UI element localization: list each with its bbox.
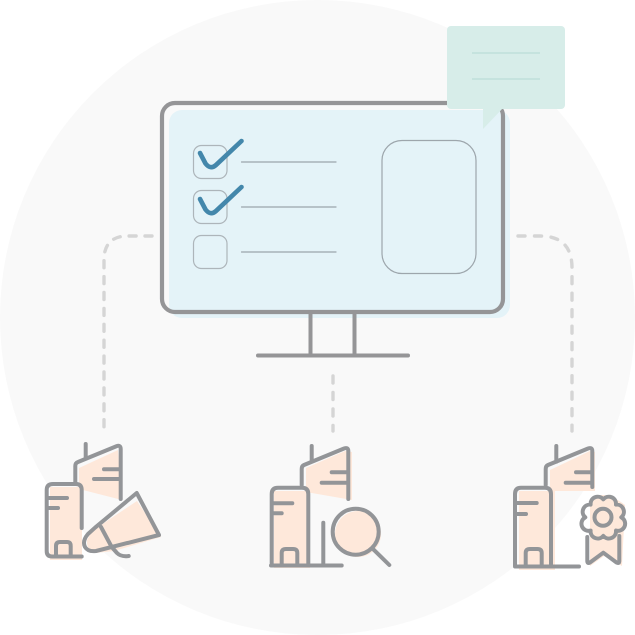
monitor stand bbox=[258, 312, 408, 356]
peach fills bbox=[274, 451, 352, 568]
dashed connector: middle bbox=[331, 376, 335, 431]
dashed connector: right bbox=[518, 236, 572, 431]
back tower bbox=[75, 444, 121, 499]
megaphone bbox=[84, 493, 159, 556]
icon: building with magnifying glass bbox=[271, 446, 389, 568]
back tower bbox=[302, 446, 348, 499]
checklist row 1 bbox=[194, 141, 336, 178]
speech bubble bbox=[447, 26, 565, 129]
image placeholder panel bbox=[382, 140, 476, 274]
front tower bbox=[515, 488, 579, 566]
front tower bbox=[271, 488, 342, 566]
monitor frame bbox=[162, 103, 503, 312]
icon: building with award ribbon bbox=[515, 446, 625, 570]
award rosette bbox=[581, 497, 625, 538]
back tower bbox=[546, 446, 592, 487]
monitor screen fill bbox=[169, 110, 510, 318]
dashed connector: left bbox=[104, 236, 152, 428]
peach fills bbox=[519, 451, 625, 570]
monitor bbox=[162, 103, 510, 356]
award ribbon bbox=[587, 536, 619, 563]
checklist row 2 bbox=[194, 187, 336, 224]
icon: building with megaphone bbox=[47, 444, 161, 560]
checklist row 3 bbox=[194, 236, 336, 268]
magnifying glass bbox=[373, 549, 389, 565]
award center ring bbox=[594, 509, 612, 526]
peach fills bbox=[50, 450, 161, 560]
front tower bbox=[47, 484, 82, 556]
